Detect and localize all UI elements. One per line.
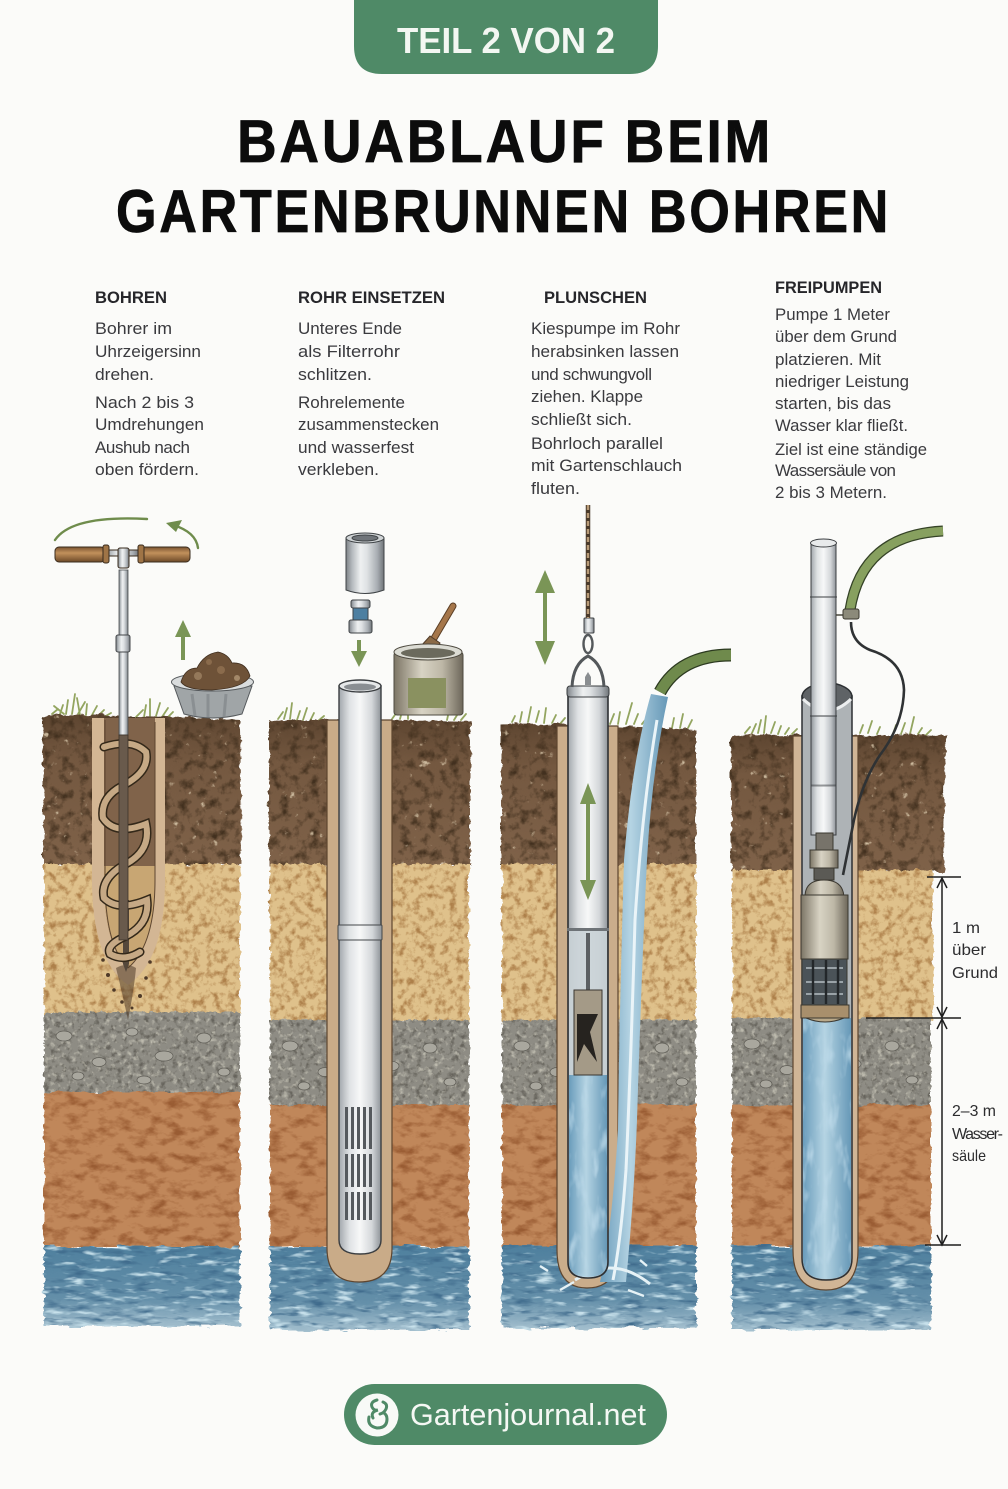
step text: Freipumpen: Ziel ist eine ständige [775,440,927,459]
step text: Bohren: Aushub nach [95,438,190,457]
soil layers [501,724,696,1328]
step text: Freipumpen: über dem Grund [775,327,897,346]
auger [103,570,147,972]
label: 1 m: Grund [952,965,998,982]
step text: Rohr einsetzen: Unteres Ende [298,319,402,338]
water stream [540,694,668,1296]
bore hole [557,726,618,1288]
step text: Plunschen: Kiespumpe im Rohr [531,319,680,338]
step text: Plunschen: Bohrloch parallel [531,434,663,453]
dirt scatter [101,958,152,1020]
step text: Freipumpen: FREIPUMPEN [775,278,882,297]
bore hole [793,736,858,1290]
part badge [354,0,658,74]
logo [356,1394,398,1436]
title: BAUABLAUF BEIM [237,108,773,175]
step text: Bohren: Uhrzeigersinn [95,342,201,361]
delivery hose [836,531,943,619]
plunger pump tube [567,686,609,1278]
arrow: up [175,620,191,660]
label: 1 m: 1 m [952,920,980,937]
step text: Bohren [95,288,204,479]
bucket with soil [172,652,254,718]
step text: Rohr einsetzen: schlitzen. [298,365,372,384]
arrow: inner motion [580,783,596,900]
step text: Freipumpen: Pumpe 1 Meter [775,305,890,324]
pipe sleeve [346,533,384,594]
step text: Plunschen: schließt sich. [531,410,632,429]
dimension: 1 m above ground [866,877,961,1018]
garden hose [660,655,731,692]
step text: Rohr einsetzen: und wasserfest [298,438,414,457]
step text: Plunschen [531,288,682,498]
step text: Bohren: Bohrer im [95,319,172,338]
label: water column: 2–3 m [952,1103,996,1120]
grass tufts [52,694,173,717]
step text: Freipumpen: Wassersäule von [775,461,896,480]
step text: Rohr einsetzen [298,288,445,479]
dimension: water column [925,1019,961,1245]
title: GARTENBRUNNEN BOHREN [116,178,891,245]
soil layers [731,734,945,1330]
label: 1 m [952,920,998,982]
grass tufts [278,703,466,721]
arrow: down [351,640,367,667]
title [116,108,891,245]
soil layers [43,715,241,1326]
step text: Rohr einsetzen: ROHR EINSETZEN [298,288,445,307]
label: 1 m: über [952,942,987,959]
handle [55,545,190,568]
power cable [843,622,904,875]
step text: Rohr einsetzen: zusammenstecken [298,415,439,434]
step text: Rohr einsetzen: verkleben. [298,460,379,479]
coupling [349,600,372,633]
label: water column [952,1103,1003,1165]
step text: Bohren: Umdrehungen [95,415,204,434]
grass tufts [512,703,692,728]
illustration: plunging [501,505,731,1328]
label: water column: säule [952,1148,986,1165]
step text: Freipumpen: niedriger Leistung [775,372,909,391]
soil layers [269,720,470,1330]
step text: Bohren: drehen. [95,365,154,384]
step text: Freipumpen: 2 bis 3 Metern. [775,483,887,502]
step text: Rohr einsetzen: als Filterrohr [298,342,400,361]
step text: Freipumpen [775,278,927,502]
step text: Plunschen: PLUNSCHEN [544,288,647,307]
grass tufts [745,716,931,735]
step text: Plunschen: mit Gartenschlauch [531,456,682,475]
step text: Bohren: Nach 2 bis 3 [95,393,194,412]
step text: Freipumpen: Wasser klar fließt. [775,416,908,435]
footer badge [344,1384,667,1445]
illustration: inserting pipe [269,533,470,1330]
step text: Plunschen: herabsinken lassen [531,342,679,361]
arrow: rotation [55,518,198,548]
illustration: pumping clear [731,531,1003,1330]
footer badge: Gartenjournal.net [410,1397,646,1432]
bore hole [92,718,165,985]
step text: Rohr einsetzen: Rohrelemente [298,393,405,412]
step text: Bohren: BOHREN [95,288,167,307]
valve [574,933,602,1075]
glue can with brush [394,606,463,715]
step text: Freipumpen: platzieren. Mit [775,350,881,369]
part badge: TEIL 2 VON 2 [397,20,615,61]
step text: Freipumpen: starten, bis das [775,394,891,413]
bore hole [327,720,392,1282]
pipe with filter slots [338,680,382,1254]
illustration: drilling [43,518,254,1326]
step text: Plunschen: fluten. [531,479,580,498]
label: water column: Wasser- [952,1126,1003,1143]
step text: Bohren: oben fördern. [95,460,199,479]
well casing [802,683,852,1280]
bail and cable [572,505,604,687]
step text: Plunschen: und schwungvoll [531,365,652,384]
arrow: pull up and down [535,570,555,665]
step text: Plunschen: ziehen. Klappe [531,387,643,406]
riser pipe [810,539,837,835]
submersible pump [801,833,849,1022]
